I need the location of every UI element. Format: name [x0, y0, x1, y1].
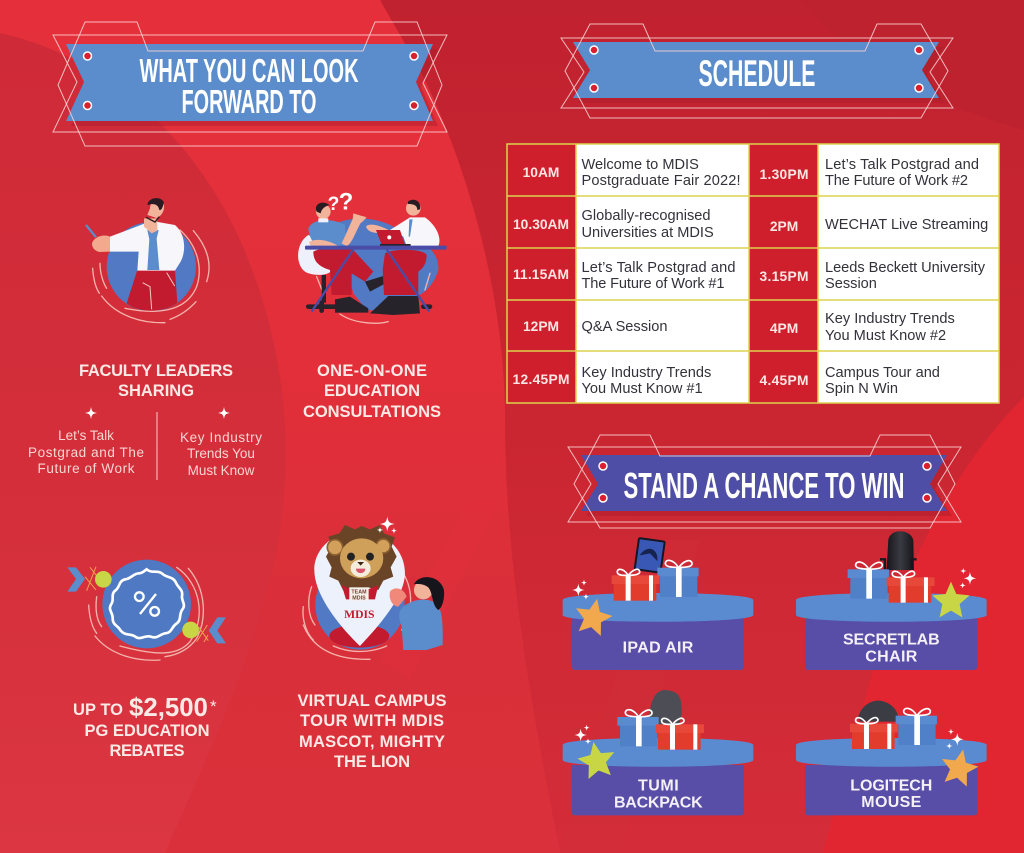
- schedule times left column: 11.15AM: [513, 267, 569, 282]
- schedule sessions right column: Leeds Beckett University: [825, 260, 986, 276]
- schedule sessions left column: Postgraduate Fair 2022!: [582, 173, 740, 189]
- heading: virtual campus tour: VIRTUAL CAMPUS: [298, 692, 446, 710]
- icon: mascot lion map pin: [303, 517, 444, 659]
- schedule sessions left column: Universities at MDIS: [582, 225, 714, 241]
- banner heading: WHAT YOU CAN LOOK: [140, 52, 359, 89]
- schedule times right column: 4.45PM: [760, 373, 808, 388]
- icon: one-on-one consultation: ?: [328, 194, 339, 215]
- heading: faculty leaders sharing: SHARING: [118, 382, 194, 400]
- text: key industry trends: Trends You: [187, 446, 255, 461]
- schedule times right column: 4PM: [770, 321, 798, 336]
- heading: virtual campus tour: TOUR WITH MDIS: [300, 712, 444, 730]
- heading: rebate: [73, 694, 217, 760]
- schedule times right column: 3.15PM: [760, 269, 808, 284]
- banner: what you can look forward to: [53, 22, 447, 146]
- heading: virtual campus tour: MASCOT, MIGHTY: [299, 733, 445, 751]
- prize: secretlab chair: [796, 531, 987, 670]
- prize: logitech mouse: [796, 701, 987, 815]
- banner heading: FORWARD TO: [182, 83, 316, 120]
- schedule sessions left column: [582, 157, 740, 397]
- text: key industry trends: Key Industry: [180, 430, 262, 445]
- schedule heading: SCHEDULE: [698, 53, 816, 94]
- prize: tumi backpack: BACKPACK: [614, 795, 703, 812]
- icon: mascot lion map pin: TEAM: [351, 589, 367, 595]
- schedule times left column: 10.30AM: [513, 217, 569, 232]
- heading: virtual campus tour: THE LION: [334, 753, 410, 771]
- schedule table: [507, 144, 999, 403]
- schedule sessions left column: Welcome to MDIS: [582, 157, 699, 173]
- schedule sessions left column: You Must Know #1: [582, 381, 703, 397]
- schedule times left column: [512, 165, 570, 387]
- schedule times right column: 2PM: [770, 219, 798, 234]
- schedule sessions right column: Let’s Talk Postgrad and: [825, 157, 979, 173]
- icon: mascot lion map pin: MDIS: [344, 608, 375, 621]
- prize: secretlab chair: SECRETLAB: [843, 631, 940, 648]
- schedule times left column: 12PM: [523, 319, 559, 334]
- prize: ipad air: [563, 537, 753, 670]
- heading: one-on-one consultations: ONE-ON-ONE: [317, 362, 427, 380]
- text: key industry trends: Must Know: [188, 463, 255, 478]
- banner: schedule: [561, 24, 953, 118]
- text: lets talk postgrad: Future of Work: [38, 461, 135, 476]
- schedule sessions right column: Session: [825, 276, 877, 292]
- heading: rebate: $2,500: [129, 694, 208, 722]
- schedule times left column: 12.45PM: [512, 372, 570, 387]
- prize: tumi backpack: TUMI: [638, 778, 679, 795]
- heading: one-on-one consultations: CONSULTATIONS: [303, 403, 441, 421]
- icon: mascot lion map pin: MDIS: [352, 595, 366, 601]
- schedule sessions right column: Key Industry Trends: [825, 311, 955, 327]
- heading: rebate: *: [210, 697, 217, 716]
- icon: sparkle left: [85, 407, 97, 419]
- schedule times left column: 10AM: [523, 165, 559, 180]
- schedule sessions left column: Key Industry Trends: [582, 365, 711, 381]
- schedule sessions right column: Campus Tour and: [825, 365, 940, 381]
- icon: one-on-one consultation: [298, 188, 447, 323]
- prize: secretlab chair: CHAIR: [865, 648, 918, 665]
- schedule sessions right column: Spin N Win: [825, 381, 898, 397]
- heading: faculty leaders sharing: [79, 362, 233, 400]
- schedule sessions right column: You Must Know #2: [825, 328, 946, 344]
- schedule times right column: 1.30PM: [760, 167, 808, 182]
- heading: faculty leaders sharing: FACULTY LEADERS: [79, 362, 233, 380]
- heading: one-on-one consultations: EDUCATION: [324, 382, 420, 400]
- schedule sessions left column: The Future of Work #1: [582, 276, 724, 292]
- icon: sparkle right: [218, 407, 230, 419]
- heading: rebate: UP TO: [73, 701, 123, 719]
- banner: stand a chance to win: [568, 435, 961, 528]
- icon: one-on-one consultation: ?: [339, 188, 353, 215]
- prize: logitech mouse: MOUSE: [861, 794, 922, 811]
- text: lets talk postgrad: Let’s Talk: [58, 428, 114, 443]
- heading: rebate: REBATES: [110, 742, 184, 760]
- schedule sessions left column: Q&A Session: [582, 319, 668, 335]
- prize: ipad air: IPAD AIR: [623, 640, 694, 657]
- prize: tumi backpack: [563, 690, 753, 815]
- prize: logitech mouse: LOGITECH: [850, 778, 932, 795]
- schedule times right column: [760, 167, 808, 388]
- schedule sessions left column: Globally-recognised: [582, 208, 710, 224]
- heading: rebate: PG EDUCATION: [84, 722, 210, 740]
- schedule sessions left column: Let’s Talk Postgrad and: [582, 260, 736, 276]
- icon: rebate percent badge: [67, 560, 226, 660]
- schedule sessions right column: [825, 157, 988, 397]
- schedule sessions right column: The Future of Work #2: [825, 173, 968, 189]
- schedule sessions right column: WECHAT Live Streaming: [825, 217, 988, 233]
- icon: faculty presenter: [86, 198, 209, 323]
- text: lets talk postgrad: Postgrad and The: [28, 445, 144, 460]
